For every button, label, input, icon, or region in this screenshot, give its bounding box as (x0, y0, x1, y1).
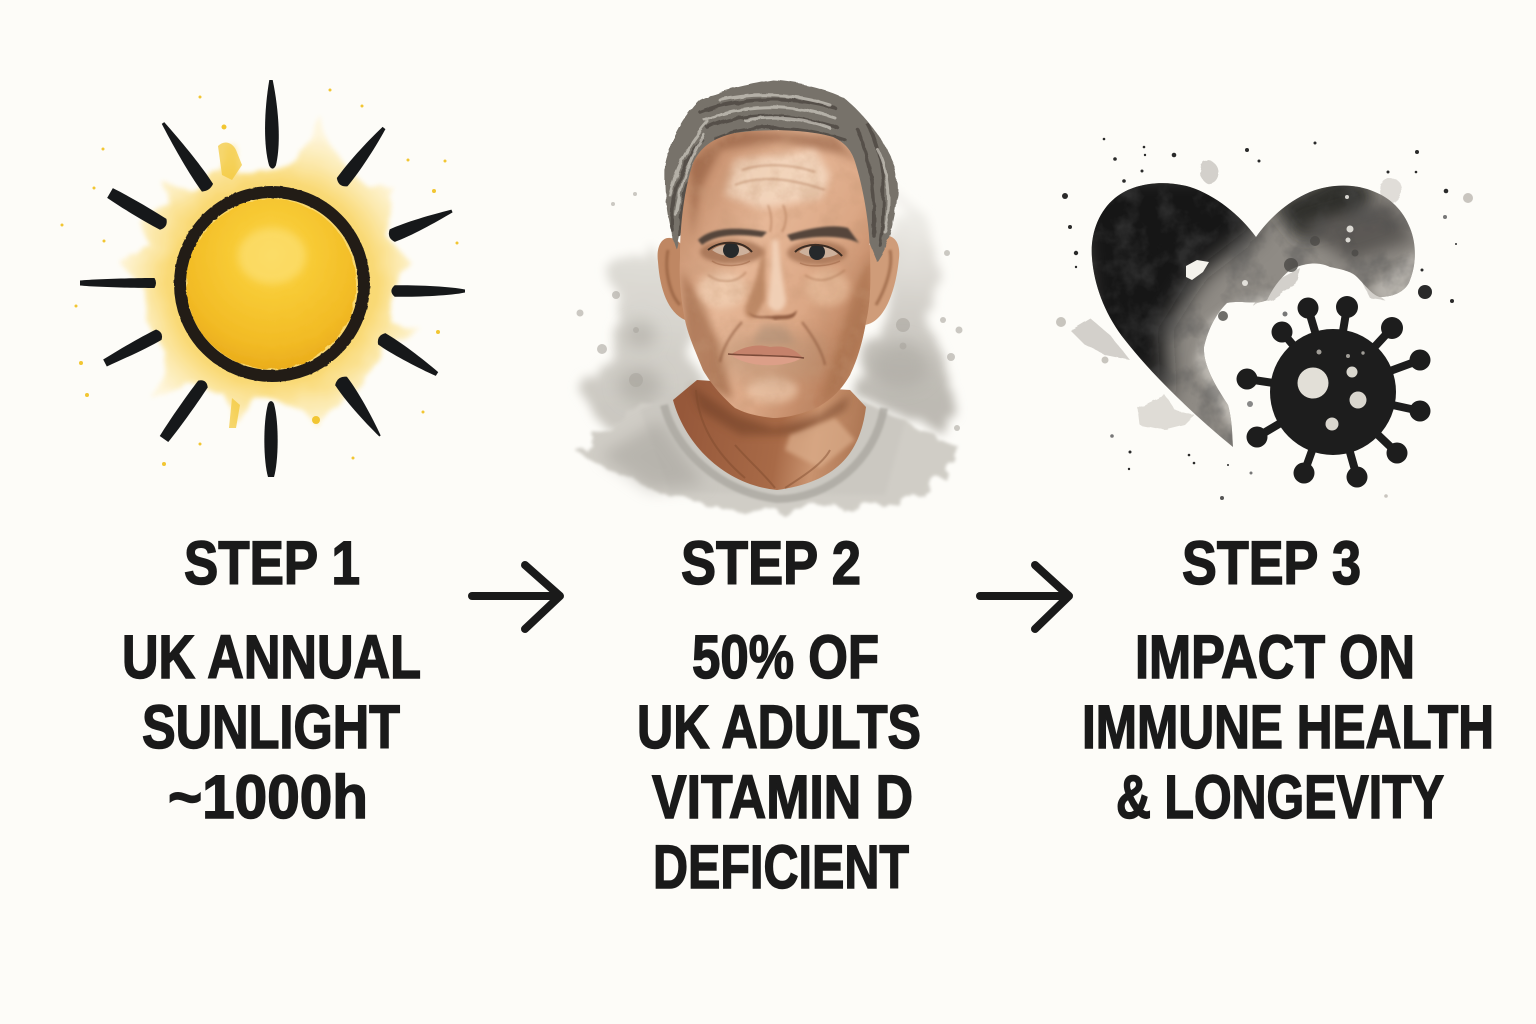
forehead highlight (725, 150, 830, 208)
hairline shadow (688, 130, 855, 228)
shirt body near neck (640, 388, 905, 495)
neck creases (696, 390, 830, 488)
neck highlight (785, 418, 855, 468)
grey watercolour wash (583, 193, 960, 430)
darker wash patches (618, 321, 930, 403)
grey splashes (1070, 161, 1402, 430)
philtrum shadow (752, 324, 796, 344)
text block: step 2 description: VITAMIN D (652, 763, 913, 831)
neck under-chin shadow (690, 385, 850, 435)
heart dark left area (1070, 170, 1258, 400)
shirt shading (600, 420, 705, 490)
virus knobs (1298, 298, 1318, 318)
text block: step 1 description: SUNLIGHT (142, 693, 400, 761)
heart dark blots (1218, 236, 1358, 321)
eye sockets (700, 240, 764, 264)
heading: step 3: STEP 3 (1182, 529, 1361, 597)
wash blots (576, 192, 962, 431)
lower face grey-brown tone (725, 335, 825, 385)
sun ring (180, 192, 364, 376)
yellow paint spatter (60, 88, 458, 466)
cheek highlights (698, 272, 746, 308)
text block: step 1 description: UK ANNUAL (122, 623, 421, 691)
hair strands (670, 95, 889, 245)
sun disc (186, 199, 356, 369)
arrow: step 1 to step 2 (472, 565, 560, 629)
text block: step 3 description: IMPACT ON (1135, 623, 1415, 691)
virus spikes (1247, 307, 1420, 477)
text block: step 3 description: & LONGEVITY (1116, 763, 1444, 831)
heading: step 1: STEP 1 (184, 529, 360, 597)
arrow: step 2 to step 3 (980, 565, 1069, 629)
heart dark right area (1272, 172, 1375, 240)
virus body (1270, 329, 1396, 455)
shirt (575, 388, 962, 510)
heart (1092, 183, 1415, 447)
heart pale lower edge (1192, 289, 1272, 434)
neck (673, 380, 866, 490)
text block: step 2 description: 50% OF (692, 623, 879, 691)
virus holes (1298, 350, 1366, 430)
text block: step 2 description: DEFICIENT (653, 833, 909, 901)
ink spatter (1062, 138, 1457, 500)
ears (658, 238, 685, 320)
forehead wrinkles (735, 165, 825, 232)
eyebrows (698, 226, 859, 245)
nose (745, 240, 797, 320)
right cheek shadow (824, 263, 870, 400)
left cheek shadow (682, 270, 733, 400)
panel: step 2 portrait illustration (575, 80, 962, 510)
pale spatter (1056, 193, 1473, 498)
sun rays (80, 80, 465, 477)
text block: step 2 description: UK ADULTS (637, 693, 921, 761)
heart white fleck (1186, 260, 1209, 280)
mouth (728, 346, 804, 365)
nasolabial folds (720, 322, 825, 365)
under-eye bags (708, 270, 845, 281)
virus (1236, 296, 1430, 488)
text block: step 2 description (637, 623, 921, 901)
hair (665, 80, 898, 262)
skin mottling (710, 152, 829, 298)
panel: step 3 heart and virus illustration (1056, 138, 1473, 500)
face (680, 130, 870, 418)
text block: step 3 description (1082, 623, 1494, 831)
heading: step 2: STEP 2 (681, 529, 861, 597)
panel: step 1 sun illustration (60, 80, 465, 477)
text block: step 1 description: ~1000h (168, 763, 368, 831)
heart pale blots (1242, 195, 1354, 286)
face shading group (680, 130, 870, 405)
eyes (708, 242, 842, 266)
watercolour halo (120, 117, 423, 428)
text block: step 1 description (122, 623, 421, 831)
collar (664, 405, 884, 499)
sun highlight (238, 228, 306, 284)
heart ink mottling (1099, 186, 1414, 447)
